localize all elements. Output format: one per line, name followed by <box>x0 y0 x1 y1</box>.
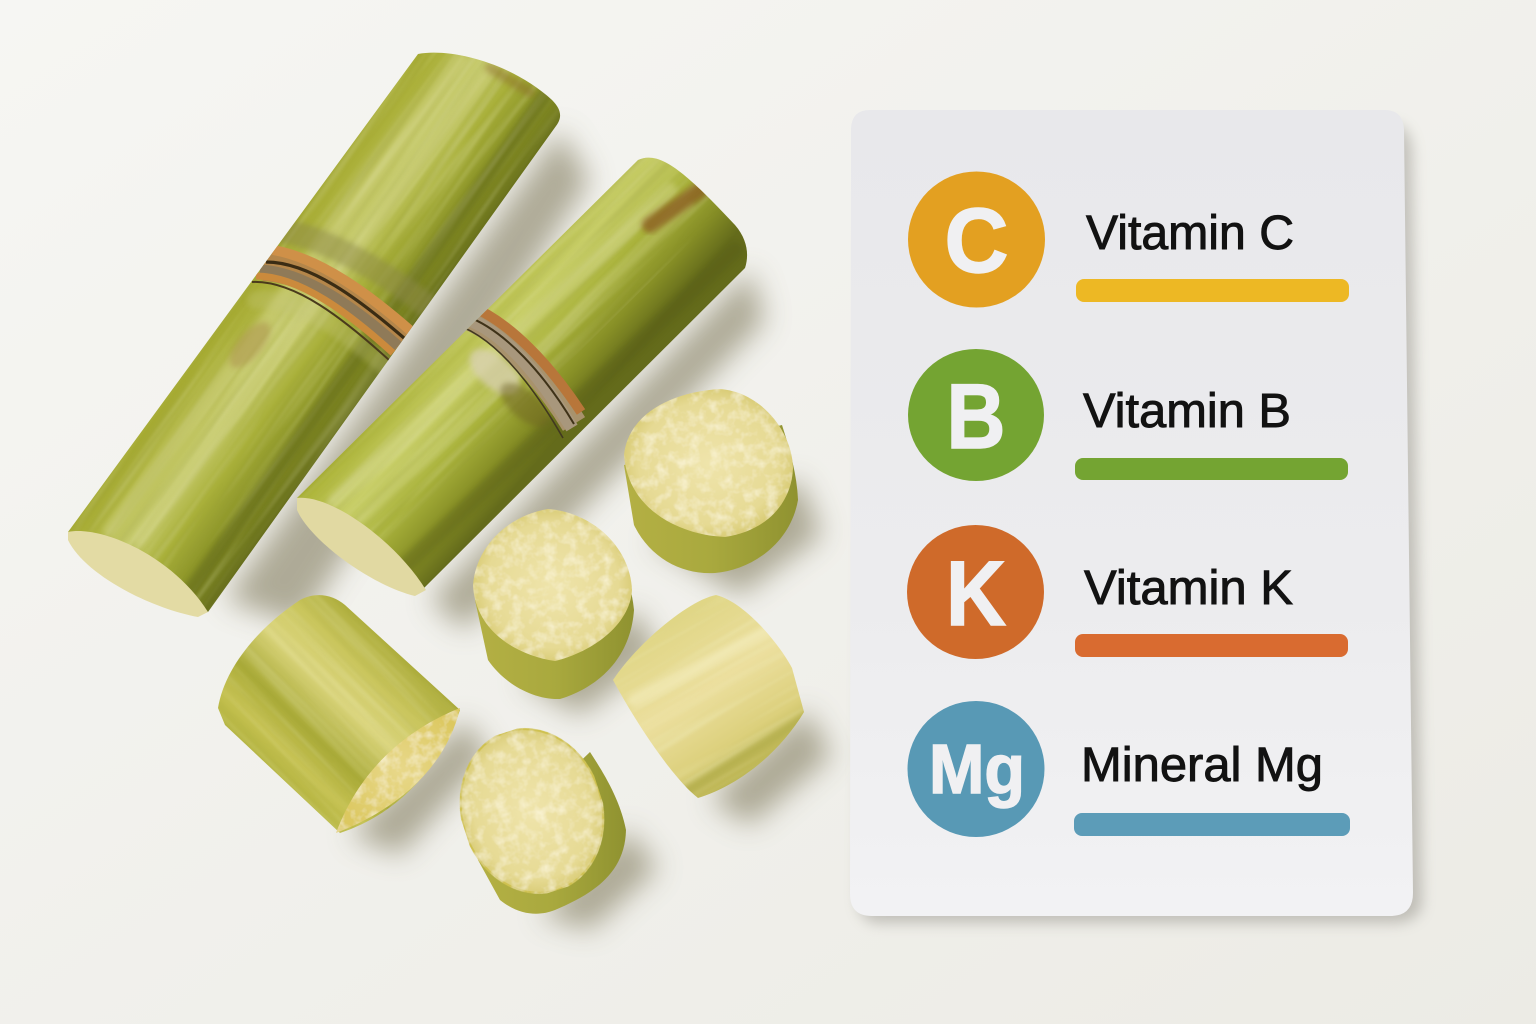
stalk fibres <box>302 158 710 570</box>
sugarcane stalk: left <box>68 52 560 617</box>
badge: B: B <box>946 366 1006 468</box>
row: Vitamin K <box>907 525 1348 659</box>
card shadow <box>858 125 1422 923</box>
label: Vitamin B: Vitamin B <box>1083 385 1291 438</box>
cut face <box>297 498 426 596</box>
sugarcane piece: middle round <box>473 509 634 699</box>
label: Vitamin K: Vitamin K <box>1084 562 1293 615</box>
badge: B <box>908 349 1044 481</box>
bar: Vitamin C <box>1076 279 1349 302</box>
pulp face <box>473 509 632 661</box>
cut face <box>68 531 208 617</box>
badge: K <box>907 525 1044 659</box>
badge: C: C <box>944 190 1008 292</box>
pulp face <box>624 389 793 537</box>
ring shade <box>286 232 426 305</box>
row: Mineral Mg <box>908 701 1350 837</box>
badge: C <box>908 172 1045 308</box>
node ring <box>252 250 412 360</box>
pulp face <box>440 710 624 912</box>
sugarcane piece: right cylinder <box>613 595 804 798</box>
sugarcane piece: left cylinder <box>218 595 460 833</box>
node ring <box>466 309 586 438</box>
row: Vitamin C <box>908 172 1349 308</box>
bar: Vitamin B <box>1075 458 1348 480</box>
badge: Mg: Mg <box>929 730 1025 808</box>
sugarcane stalk: right <box>297 158 748 596</box>
sugarcane piece: top right round <box>624 389 798 573</box>
card panel <box>850 110 1413 916</box>
bar: Vitamin K <box>1075 634 1348 657</box>
sugarcane group <box>68 52 843 944</box>
bar: Mineral Mg <box>1074 813 1350 836</box>
stalk fibres <box>220 596 432 833</box>
pulp face <box>336 708 460 833</box>
row: Vitamin B <box>908 349 1348 481</box>
badge: K: K <box>946 543 1006 645</box>
shadows under sugarcane <box>225 130 832 930</box>
nutrient card <box>850 110 1413 916</box>
label: Vitamin C: Vitamin C <box>1086 207 1294 260</box>
stalk fibres <box>626 620 804 794</box>
badge: Mg <box>908 701 1044 837</box>
stalk fibres <box>73 53 558 600</box>
sugarcane piece: bottom round <box>440 710 626 914</box>
label: Mineral Mg: Mineral Mg <box>1081 739 1323 792</box>
